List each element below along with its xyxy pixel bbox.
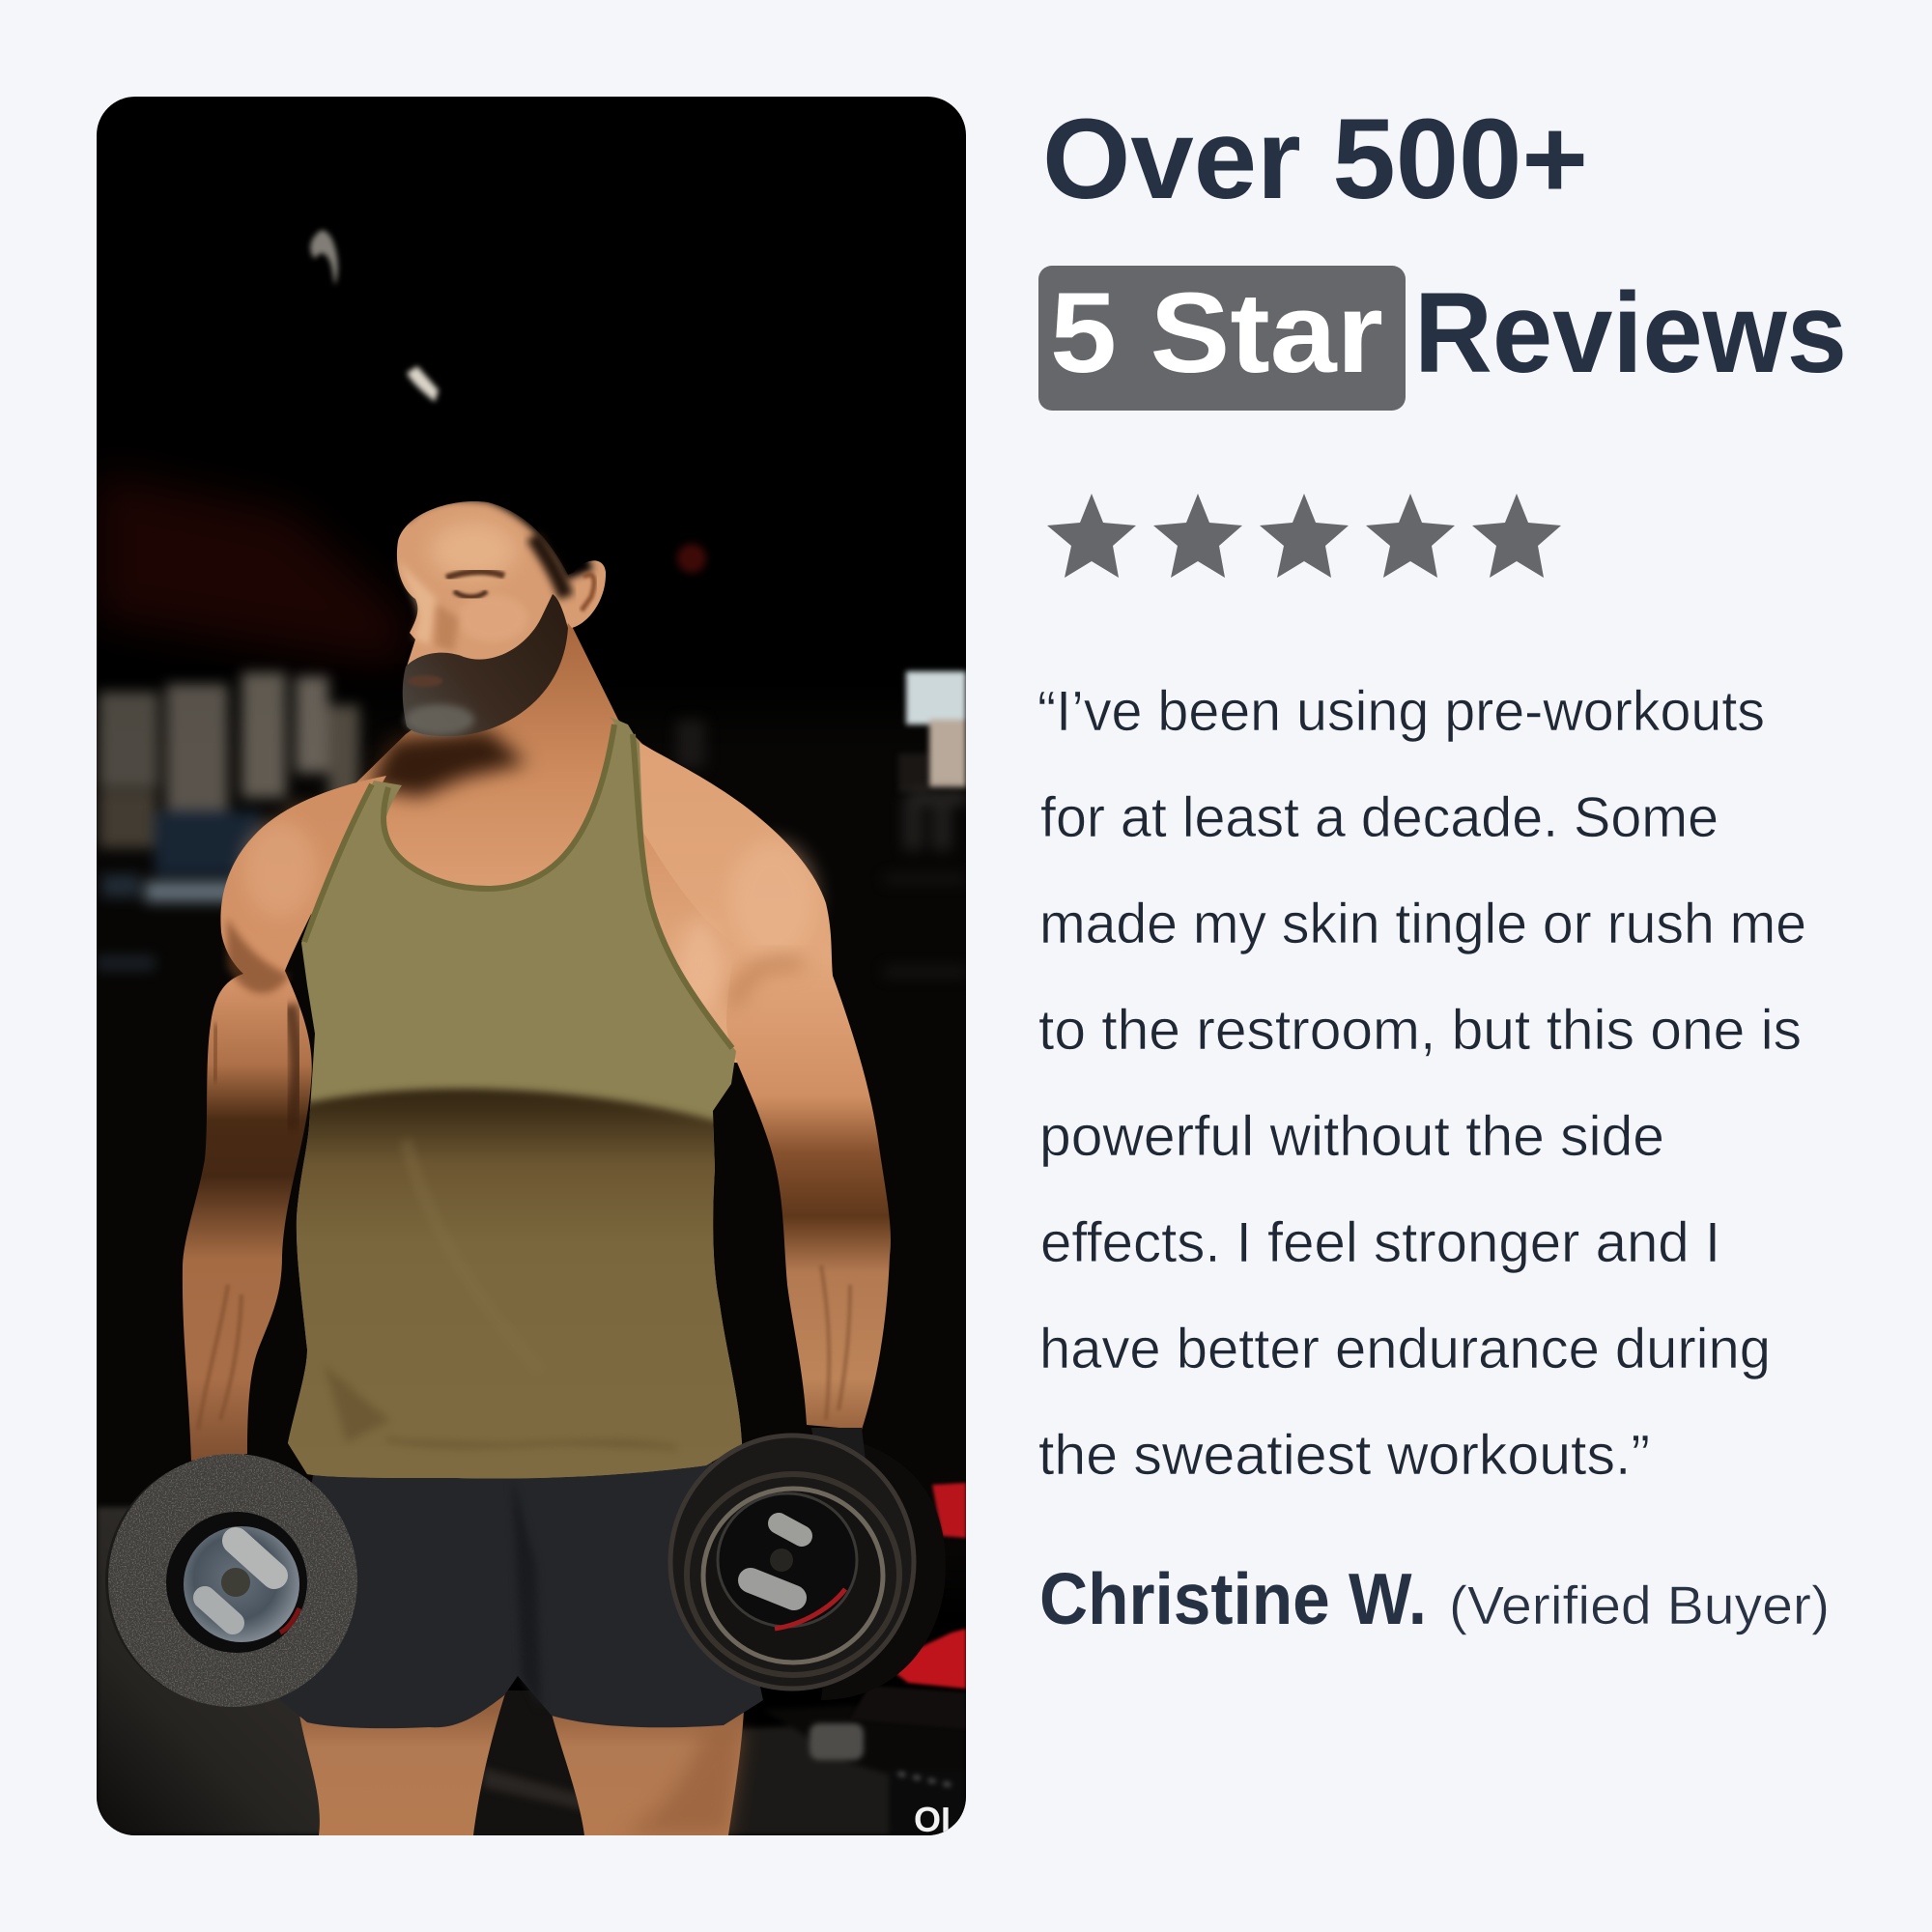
- highlighted words: 5 Star: [1050, 270, 1383, 397]
- legs: [299, 1690, 744, 1835]
- review quote: powerful without the side: [1039, 1105, 1664, 1168]
- heading: [1038, 96, 1847, 411]
- red bench: [850, 1483, 966, 1729]
- chest and neck skin: [307, 618, 744, 1063]
- review quote: to the restroom, but this one is: [1038, 999, 1802, 1062]
- left dumbbell: [105, 1454, 357, 1707]
- ear: [582, 575, 594, 611]
- plate engravings: [779, 1523, 802, 1536]
- review quote: the sweatiest workouts.”: [1038, 1424, 1650, 1487]
- corner logo in photo: OI: [914, 1800, 951, 1839]
- shorts: [280, 1454, 763, 1728]
- reviewer attribution: Christine W.: [1039, 1558, 1427, 1639]
- brow and eye: [446, 572, 504, 578]
- reviewer attribution: (Verified Buyer): [1449, 1575, 1830, 1635]
- right arm: [638, 742, 891, 1430]
- tank shadow band: [275, 1089, 763, 1492]
- head: [396, 485, 606, 736]
- highlight pill: [1038, 266, 1406, 411]
- heading line one: Over 500+: [1042, 96, 1588, 223]
- tank neckline and strap trim: [304, 724, 732, 1048]
- ceiling lights: [310, 230, 439, 402]
- plate engravings: [236, 1541, 274, 1576]
- heading word reviews: Reviews: [1414, 270, 1847, 397]
- review quote: [1037, 680, 1806, 1487]
- gym floor: [97, 1507, 966, 1835]
- review quote: for at least a decade. Some: [1040, 786, 1719, 849]
- tank folds: [328, 1372, 676, 1449]
- beard: [403, 594, 568, 736]
- tank top: [275, 717, 763, 1492]
- review quote: have better endurance during: [1039, 1318, 1771, 1380]
- five star rating: [1047, 494, 1561, 578]
- right dumbbell: [670, 1428, 946, 1700]
- gym background haze and equipment: [58, 473, 1005, 1584]
- review quote: made my skin tingle or rush me: [1039, 893, 1806, 955]
- panel: gym photo illustration: [58, 97, 1005, 1839]
- facial shading: [430, 522, 517, 580]
- reviewer attribution: [1039, 1558, 1830, 1639]
- left arm: [183, 776, 386, 1461]
- shorts fold shading: [516, 1509, 539, 1696]
- review quote: “I’ve been using pre-workouts: [1037, 680, 1765, 743]
- neck shadow: [367, 729, 526, 797]
- review quote: effects. I feel stronger and I: [1040, 1211, 1720, 1274]
- hairline: [396, 485, 580, 575]
